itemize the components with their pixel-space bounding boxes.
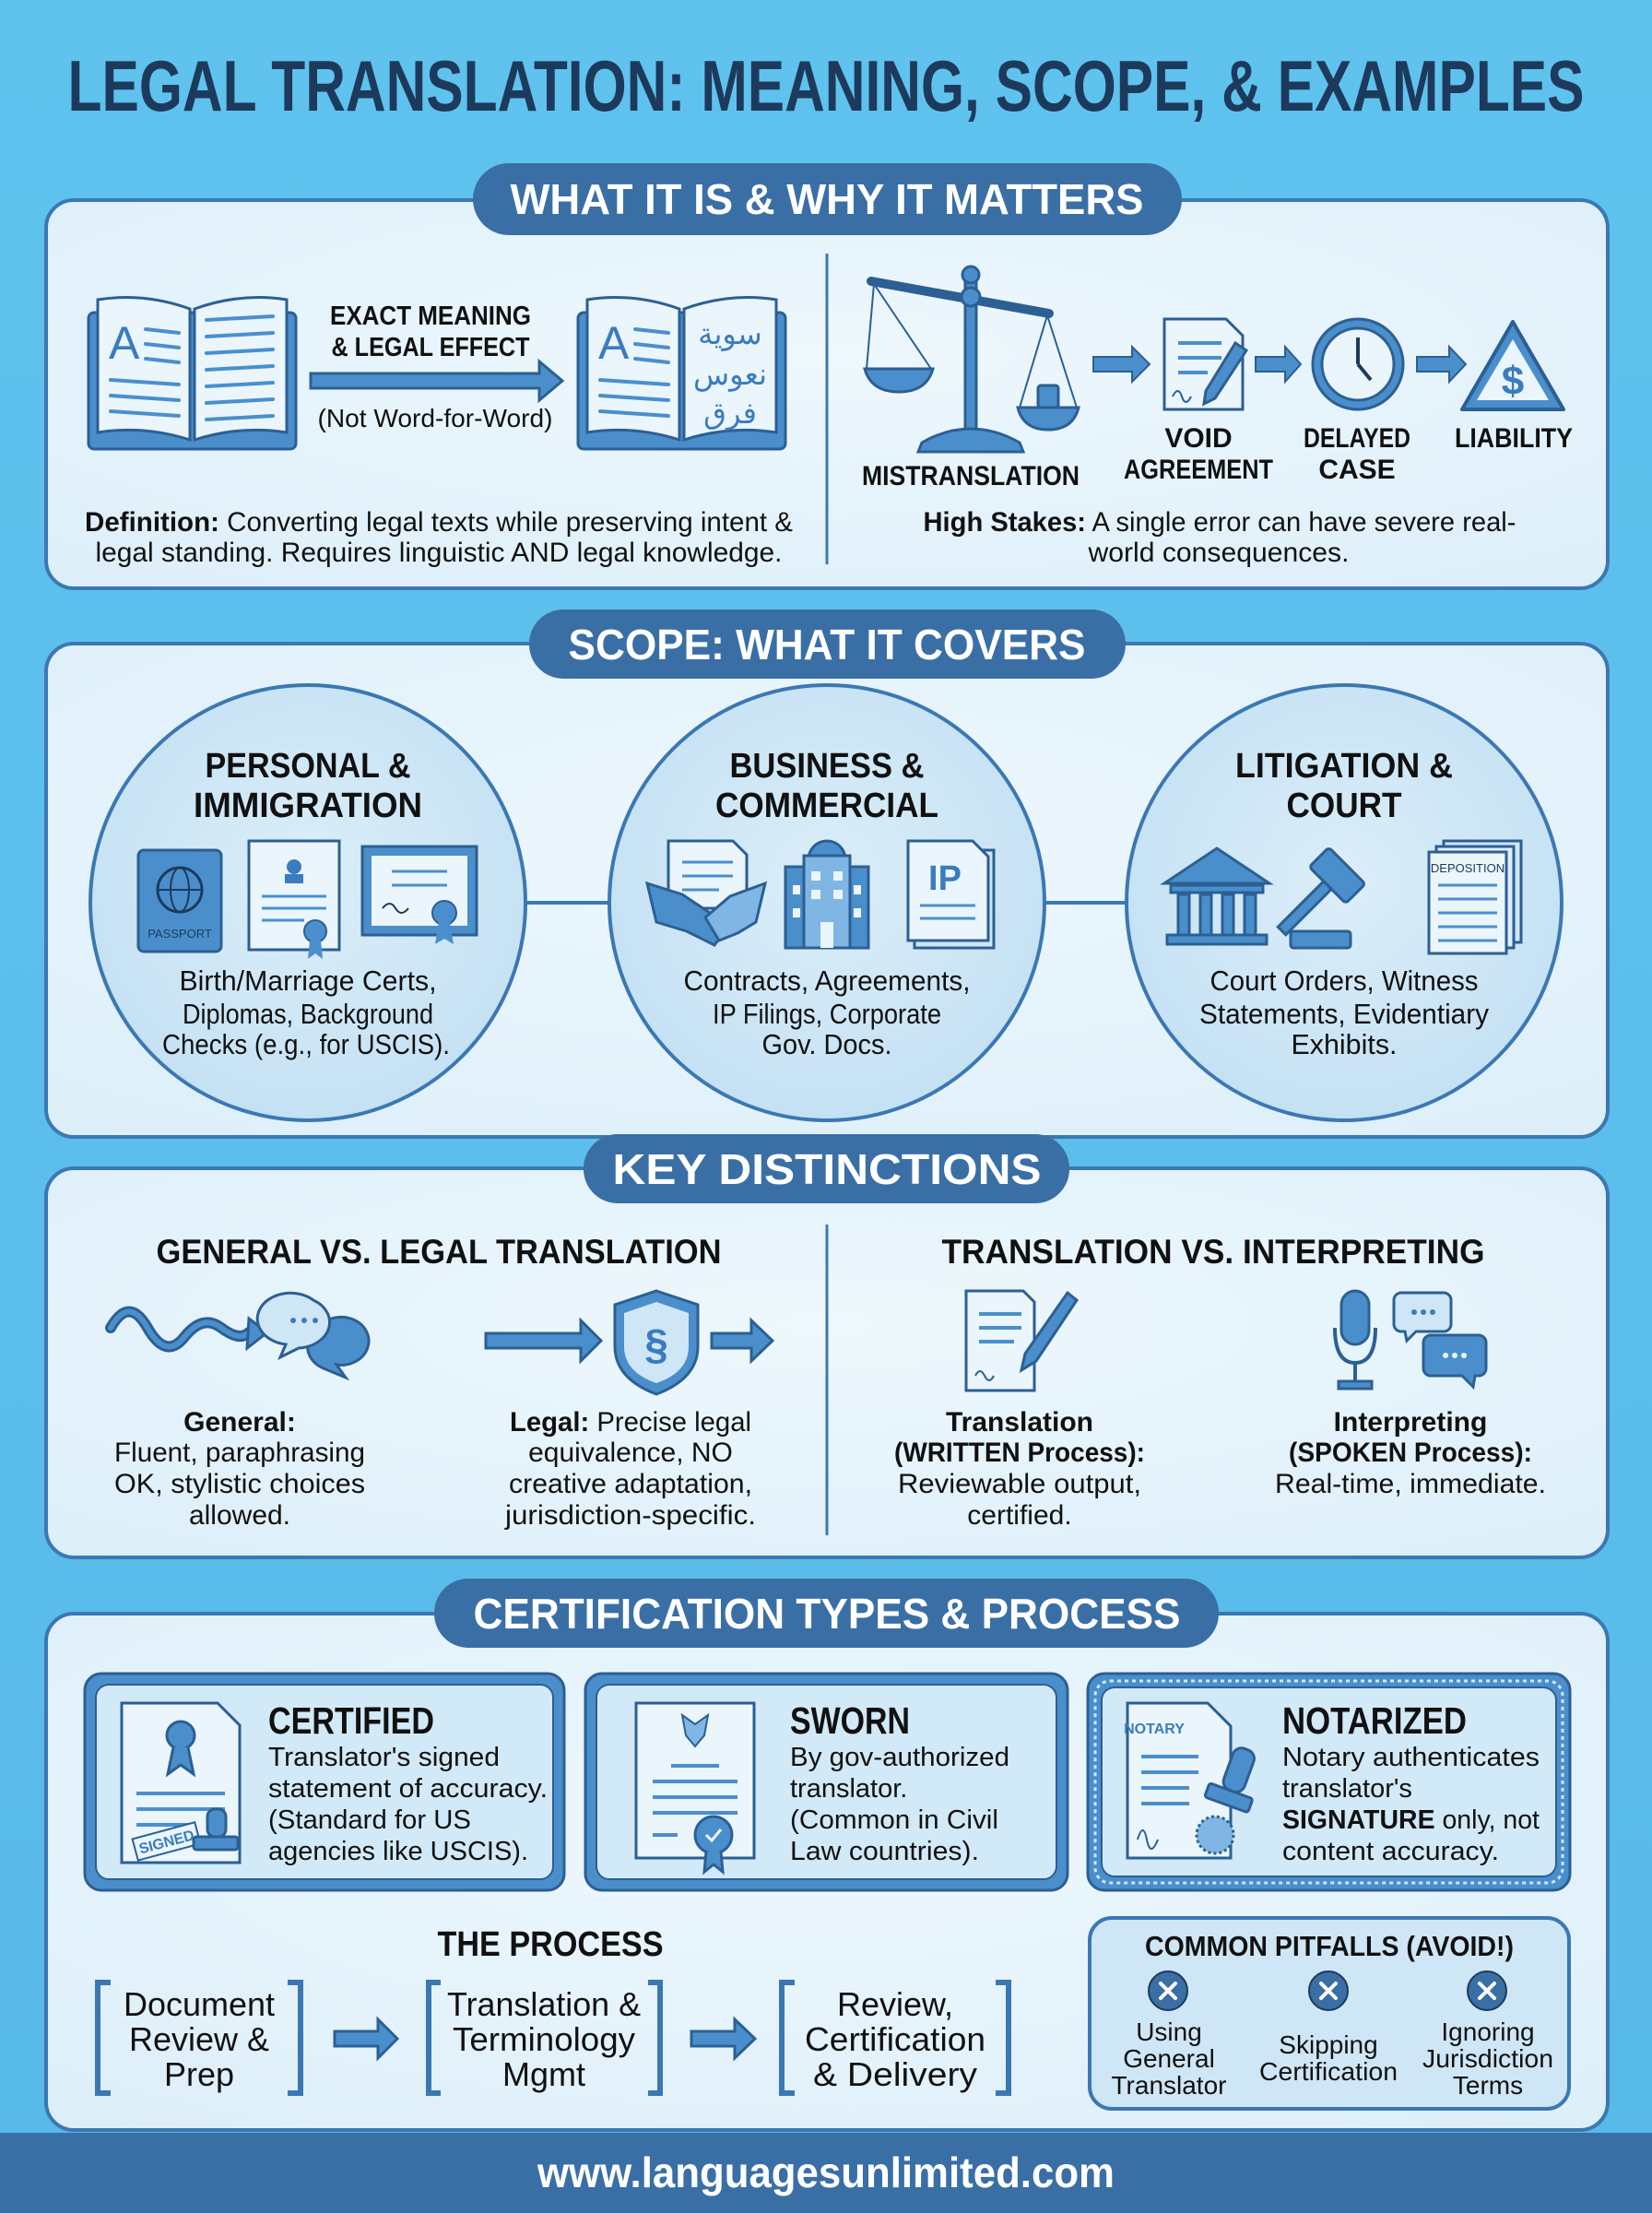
footer: www.languagesunlimited.com xyxy=(537,2148,1115,2196)
icon: liability triangle: $ xyxy=(1502,359,1524,404)
card: notarized: NOTARIZED xyxy=(1282,1699,1467,1742)
circle: personal: IMMIGRATION xyxy=(194,787,422,825)
icon: target book xyxy=(578,298,785,449)
process step 1 xyxy=(98,1982,301,2093)
arrow: exact meaning: EXACT MEANING xyxy=(330,302,531,331)
icon: microphone and bubbles xyxy=(1335,1291,1486,1389)
icon: diploma xyxy=(362,846,477,944)
text: legal: jurisdiction-specific. xyxy=(504,1500,756,1531)
icon: gavel xyxy=(1264,847,1365,949)
card: sworn: SWORN xyxy=(790,1699,910,1742)
card: notarized: Notary authenticates xyxy=(1282,1743,1540,1772)
text: interpreting xyxy=(1275,1407,1546,1499)
circle: business: Contracts, Agreements, xyxy=(684,964,970,997)
arrow xyxy=(1093,347,1150,382)
text: translation: Reviewable output, xyxy=(898,1469,1141,1499)
process step 1: Document xyxy=(124,1985,275,2023)
panel: what it is xyxy=(46,163,1608,588)
icon: certified doc xyxy=(122,1703,240,1863)
process step 2: Translation & xyxy=(447,1985,641,2023)
icon: passport xyxy=(138,850,221,952)
high stakes text xyxy=(924,507,1516,568)
box: common pitfalls: Ignoring xyxy=(1441,2018,1535,2046)
icon: target book: نعوس xyxy=(693,358,767,392)
definition text xyxy=(85,507,793,568)
icon: source book xyxy=(88,298,296,449)
process step 2: Terminology xyxy=(453,2020,635,2058)
circle: personal: Birth/Marriage Certs, xyxy=(179,964,437,997)
panel: scope xyxy=(46,609,1608,1137)
icon: target book: سوية xyxy=(698,317,762,351)
circle: litigation: COURT xyxy=(1287,787,1401,825)
card: sworn: By gov-authorized xyxy=(790,1743,1009,1772)
text: general: General: xyxy=(183,1407,296,1438)
process step 2: Mgmt xyxy=(502,2055,585,2093)
icon: void agreement doc xyxy=(1164,319,1246,409)
circle: business: Gov. Docs. xyxy=(761,1028,892,1060)
icon: clock xyxy=(1313,319,1403,409)
text: interpreting: Interpreting xyxy=(1334,1407,1487,1438)
text: general: Fluent, paraphrasing xyxy=(114,1438,365,1468)
icon: arrow shield arrow xyxy=(486,1291,773,1394)
icon: notary doc xyxy=(1124,1703,1268,1858)
footer xyxy=(0,2133,1652,2213)
icon: notary doc: NOTARY xyxy=(1124,1722,1185,1737)
icon: sworn doc xyxy=(636,1703,754,1872)
box: common pitfalls: General xyxy=(1123,2044,1215,2073)
pill heading: certification: CERTIFICATION TYPES & PROCESS xyxy=(474,1590,1180,1638)
arrow: exact meaning: & LEGAL EFFECT xyxy=(332,333,530,362)
text: legal xyxy=(504,1407,756,1531)
arrow xyxy=(691,2019,755,2058)
box: common pitfalls: Skipping xyxy=(1279,2030,1378,2059)
pill heading: what it is xyxy=(473,163,1182,235)
process step 3: & Delivery xyxy=(813,2055,977,2093)
circle: litigation: Court Orders, Witness xyxy=(1210,964,1479,997)
icon: deposition docs: DEPOSITION xyxy=(1431,861,1504,875)
circle: business: IP Filings, Corporate xyxy=(713,998,941,1030)
text: translation: Translation xyxy=(946,1407,1093,1438)
icon: certificate xyxy=(249,841,339,959)
arrow: exact meaning: (Not Word-for-Word) xyxy=(317,404,553,432)
card: certified: statement of accuracy. xyxy=(268,1774,548,1804)
text: translation xyxy=(894,1407,1145,1531)
box: common pitfalls: COMMON PITFALLS (AVOID!) xyxy=(1145,1930,1514,1962)
definition text: legal standing. Requires linguistic AND legal knowledge. xyxy=(96,538,782,568)
text: legal: equivalence, NO xyxy=(528,1438,733,1468)
text: general: allowed. xyxy=(189,1500,290,1531)
box: common pitfalls xyxy=(1090,1918,1569,2109)
card: certified: CERTIFIED xyxy=(268,1699,434,1742)
high stakes text: world consequences. xyxy=(1087,538,1350,568)
pill heading: certification xyxy=(434,1579,1219,1648)
icon: certified doc: SIGNED xyxy=(137,1828,196,1858)
panel: key distinctions xyxy=(46,1134,1608,1557)
panel: certification xyxy=(46,1579,1608,2130)
icon: wavy arrow and chat xyxy=(111,1293,369,1378)
labels: consequences: DELAYED xyxy=(1304,423,1410,454)
pill heading: scope xyxy=(529,609,1126,679)
pill heading: what it is: WHAT IT IS & WHY IT MATTERS xyxy=(511,175,1143,223)
icon: target book: A xyxy=(598,317,630,369)
text: legal: Legal: Precise legal xyxy=(510,1407,751,1438)
icon: source book: A xyxy=(109,317,140,369)
process step 3 xyxy=(782,1982,1009,2093)
pill heading: distinctions xyxy=(584,1134,1069,1203)
icon: handshake with contract xyxy=(647,841,765,945)
icon: courthouse xyxy=(1164,848,1269,944)
card: notarized: SIGNATURE only, not xyxy=(1282,1805,1540,1835)
labels: consequences: LIABILITY xyxy=(1455,423,1573,454)
text: general xyxy=(114,1407,365,1531)
icon: liability triangle xyxy=(1462,322,1564,409)
box: common pitfalls: Translator xyxy=(1111,2071,1227,2100)
heading: general vs legal: GENERAL VS. LEGAL TRANSLATION xyxy=(157,1233,721,1271)
card: sworn: (Common in Civil xyxy=(790,1805,998,1835)
process step 2 xyxy=(429,1982,660,2093)
box: common pitfalls: Jurisdiction xyxy=(1422,2044,1553,2073)
pill heading: distinctions: KEY DISTINCTIONS xyxy=(612,1145,1042,1193)
text: general: OK, stylistic choices xyxy=(114,1469,365,1499)
process step 1: Review & xyxy=(129,2020,269,2058)
card: sworn: Law countries). xyxy=(790,1837,979,1866)
labels: consequences: VOID xyxy=(1164,423,1233,454)
circle: litigation: Exhibits. xyxy=(1291,1028,1398,1060)
label: mistranslation: MISTRANSLATION xyxy=(862,461,1080,491)
card: notarized: content accuracy. xyxy=(1282,1837,1499,1866)
card: notarized: translator's xyxy=(1282,1774,1412,1804)
circle: personal: PERSONAL & xyxy=(205,747,411,786)
arrow: exact meaning xyxy=(311,302,562,432)
card: sworn xyxy=(585,1674,1068,1890)
circle: personal: Diplomas, Background xyxy=(183,998,433,1030)
circle: personal: Checks (e.g., for USCIS). xyxy=(162,1028,450,1060)
card: certified: agencies like USCIS). xyxy=(268,1837,528,1866)
circle: litigation: Statements, Evidentiary xyxy=(1199,998,1489,1030)
icon: IP document xyxy=(908,841,994,948)
icon: scales xyxy=(865,266,1079,452)
labels: consequences: AGREEMENT xyxy=(1124,455,1273,485)
box: common pitfalls: Terms xyxy=(1453,2071,1523,2100)
heading: translation vs interpreting: TRANSLATION VS. INTERPRETING xyxy=(942,1233,1484,1271)
arrow xyxy=(335,2019,397,2058)
box: common pitfalls: Certification xyxy=(1259,2057,1398,2086)
arrow xyxy=(1256,347,1301,382)
icon: IP document: IP xyxy=(928,859,962,898)
circle: business: BUSINESS & xyxy=(730,747,924,786)
process step 3: Certification xyxy=(805,2020,985,2058)
text: interpreting: Real-time, immediate. xyxy=(1275,1469,1546,1499)
icon: x marks xyxy=(1149,1971,1506,2010)
pill heading: scope: SCOPE: WHAT IT COVERS xyxy=(568,621,1086,669)
high stakes text: High Stakes: A single error can have severe real- xyxy=(924,507,1516,538)
card: sworn: translator. xyxy=(790,1774,907,1804)
card: certified xyxy=(85,1674,564,1890)
card: notarized xyxy=(1088,1674,1570,1890)
icon: building xyxy=(785,841,868,948)
icon: arrow shield arrow: § xyxy=(644,1320,668,1368)
arrow xyxy=(1417,347,1466,382)
labels: consequences: CASE xyxy=(1318,455,1396,485)
icon: document with pen xyxy=(966,1291,1077,1391)
circle: business xyxy=(609,685,1044,1120)
icon: passport: PASSPORT xyxy=(148,927,212,941)
circle: litigation: LITIGATION & xyxy=(1235,747,1453,786)
definition text: Definition: Converting legal texts while preserving intent & xyxy=(85,507,793,538)
text: interpreting: (SPOKEN Process): xyxy=(1289,1438,1532,1468)
text: legal: creative adaptation, xyxy=(509,1469,752,1499)
process step 1: Prep xyxy=(164,2055,234,2093)
heading: the process: THE PROCESS xyxy=(437,1925,664,1964)
card: certified: Translator's signed xyxy=(268,1743,500,1772)
circle: business: COMMERCIAL xyxy=(715,787,938,825)
circle: personal xyxy=(90,685,525,1120)
circle: litigation xyxy=(1127,685,1562,1120)
text: translation: certified. xyxy=(967,1500,1072,1531)
labels: consequences xyxy=(1124,423,1573,485)
card: certified: (Standard for US xyxy=(268,1805,471,1835)
icon: deposition docs xyxy=(1429,841,1521,953)
text: translation: (WRITTEN Process): xyxy=(894,1438,1145,1468)
process step 3: Review, xyxy=(837,1985,953,2023)
box: common pitfalls: Using xyxy=(1136,2018,1202,2046)
icon: target book: فرق xyxy=(703,396,757,431)
